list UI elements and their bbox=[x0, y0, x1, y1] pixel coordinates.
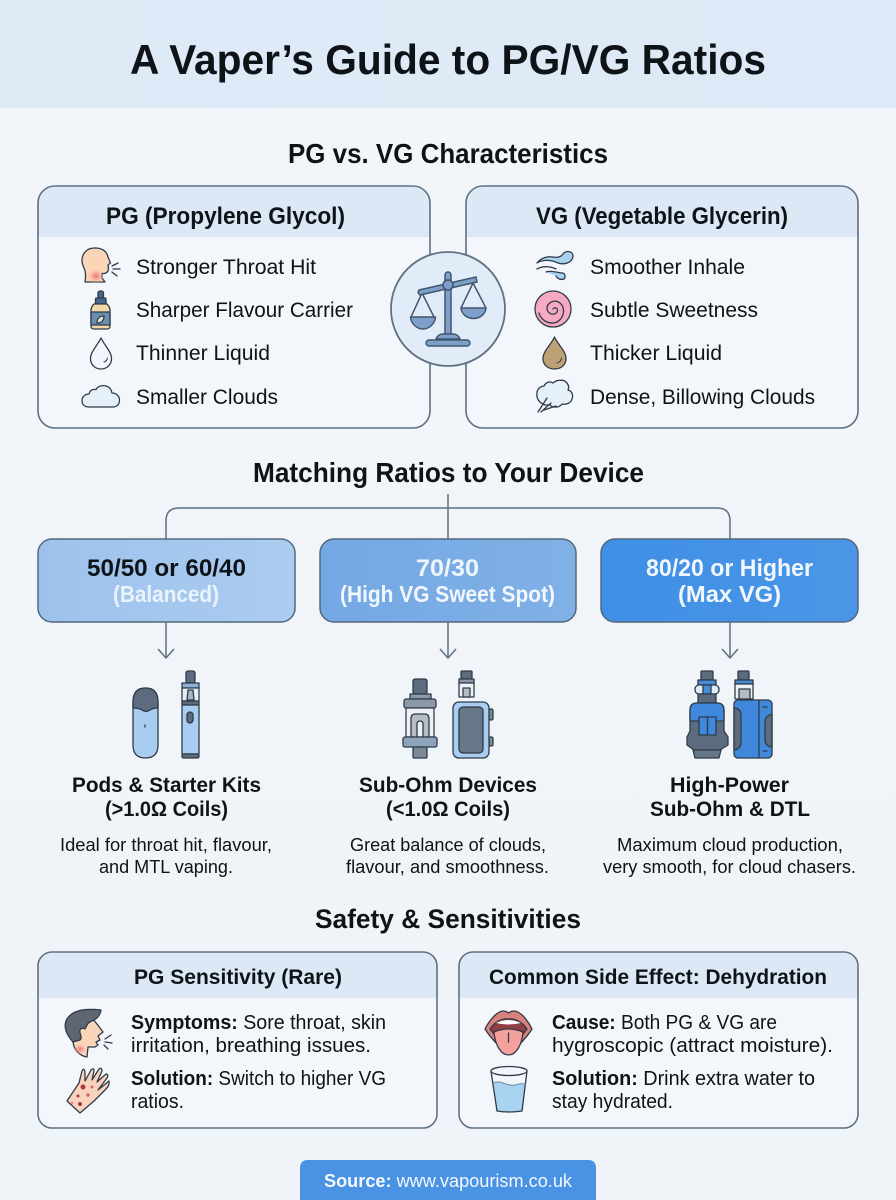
box: 80/20 or Higher: 80/20 or Higher bbox=[646, 555, 813, 582]
icon: thin drop bbox=[90, 338, 112, 369]
text: High-Power Sub-Ohm and DTL: High-Power bbox=[670, 773, 790, 797]
text: Smoother Inhale: Smoother Inhale bbox=[590, 255, 745, 279]
panel: VG bbox=[466, 186, 858, 428]
text: Sub-Ohm Devices bbox=[359, 773, 537, 821]
text: Sub-Ohm description: Great balance of clouds, bbox=[350, 834, 546, 855]
title: A Vaper’s Guide to PG/VG Ratios bbox=[130, 36, 766, 83]
panel: PG Sensitivity: ratios. bbox=[131, 1091, 184, 1113]
text: Sub-Ohm description bbox=[346, 834, 549, 877]
box: 70/30: 70/30 bbox=[416, 555, 479, 582]
text: High-Power description bbox=[603, 834, 856, 877]
box: 50/50 or 60/40 bbox=[38, 539, 295, 622]
title banner bbox=[0, 0, 896, 108]
box: 50/50 or 60/40: 50/50 or 60/40 bbox=[87, 555, 246, 582]
icon: billowing cloud bbox=[537, 380, 573, 412]
arrow: sweet spot to sub-ohm bbox=[440, 622, 456, 658]
panel: PG bbox=[38, 186, 430, 428]
arrow: max VG to high power bbox=[722, 622, 738, 658]
icon: small cloud bbox=[82, 386, 120, 407]
panel heading: PG: PG (Propylene Glycol) bbox=[106, 203, 345, 230]
icon: sub-ohm tank and box mod bbox=[403, 671, 493, 758]
text: Pods description: and MTL vaping. bbox=[99, 856, 233, 877]
text: Stronger Throat Hit: Stronger Throat Hit bbox=[136, 255, 316, 279]
box: 80/20 or Higher: (Max VG) bbox=[678, 581, 781, 607]
text: Sub-Ohm description: flavour, and smoothness. bbox=[346, 856, 549, 877]
text: Sub-Ohm Devices: Sub-Ohm Devices bbox=[359, 773, 537, 797]
panel: Dehydration bbox=[459, 952, 858, 1128]
heading: Safety and Sensitivities: Safety & Sensitivities bbox=[315, 904, 581, 934]
icon: sore throat head bbox=[65, 1009, 112, 1057]
icon: pod and starter pen bbox=[133, 671, 199, 758]
text: High-Power description: Maximum cloud production, bbox=[617, 834, 843, 855]
arrow: balanced to pods bbox=[158, 622, 174, 658]
text: Solution water: Solution: Drink extra water to bbox=[552, 1068, 815, 1090]
panel: PG Sensitivity bbox=[38, 952, 437, 1128]
text: Subtle Sweetness: Subtle Sweetness bbox=[590, 298, 758, 322]
panel: Dehydration: stay hydrated. bbox=[552, 1091, 673, 1113]
text: Cause: Cause: Both PG & VG are bbox=[552, 1012, 777, 1034]
box: 70/30: (High VG Sweet Spot) bbox=[340, 581, 555, 607]
panel heading: PG Sensitivity: PG Sensitivity (Rare) bbox=[134, 965, 342, 989]
heading: Matching Ratios to Your Device: Matching Ratios to Your Device bbox=[253, 457, 644, 488]
icon: balance scale bbox=[391, 252, 505, 366]
icon: rash hand bbox=[67, 1068, 109, 1113]
icon: flavour bottle bbox=[91, 291, 110, 329]
text: Thicker Liquid: Thicker Liquid bbox=[590, 341, 722, 365]
icon: mouth and tongue bbox=[485, 1011, 532, 1055]
panel: PG Sensitivity: irritation, breathing issues. bbox=[131, 1035, 371, 1057]
panel heading: Dehydration: Common Side Effect: Dehydration bbox=[489, 965, 827, 989]
source badge: Source: www.vapourism.co.uk bbox=[324, 1170, 573, 1191]
text: Pods description bbox=[60, 834, 272, 877]
text: Pods and Starter Kits bbox=[72, 773, 261, 821]
box: 70/30 bbox=[320, 539, 576, 622]
icon: thick drop bbox=[543, 337, 566, 369]
text: Pods and Starter Kits: (>1.0Ω Coils) bbox=[105, 797, 228, 821]
text: High-Power description: very smooth, for cloud chasers. bbox=[603, 856, 856, 877]
text: Sharper Flavour Carrier: Sharper Flavour Carrier bbox=[136, 298, 353, 322]
heading: PG vs. VG Characteristics: PG vs. VG Characteristics bbox=[288, 138, 608, 169]
icon: high-power tank and mod bbox=[687, 671, 772, 758]
text: Pods and Starter Kits: Pods & Starter Kits bbox=[72, 773, 261, 797]
panel heading: VG: VG (Vegetable Glycerin) bbox=[536, 203, 788, 230]
connector tree bbox=[166, 494, 730, 539]
panel: Dehydration: hygroscopic (attract moisture). bbox=[552, 1035, 833, 1057]
icon: throat bbox=[82, 248, 120, 284]
text: Symptoms: Symptoms: Sore throat, skin bbox=[131, 1012, 386, 1034]
icon: wind bbox=[537, 252, 573, 279]
text: Dense, Billowing Clouds: Dense, Billowing Clouds bbox=[590, 385, 815, 409]
icon: sweet swirl bbox=[535, 291, 571, 327]
text: Sub-Ohm Devices: (<1.0Ω Coils) bbox=[386, 797, 510, 821]
text: Pods description: Ideal for throat hit, flavour, bbox=[60, 834, 272, 855]
box: 80/20 or Higher bbox=[601, 539, 858, 622]
text: Thinner Liquid: Thinner Liquid bbox=[136, 341, 270, 365]
text: High-Power Sub-Ohm and DTL: Sub-Ohm & DTL bbox=[650, 797, 810, 821]
text: Solution switch: Solution: Switch to higher VG bbox=[131, 1068, 386, 1090]
source badge bbox=[300, 1160, 596, 1200]
box: 50/50 or 60/40: (Balanced) bbox=[113, 581, 219, 607]
icon: glass of water bbox=[491, 1066, 527, 1112]
text: Smaller Clouds: Smaller Clouds bbox=[136, 385, 278, 409]
text: High-Power Sub-Ohm and DTL bbox=[650, 773, 810, 821]
